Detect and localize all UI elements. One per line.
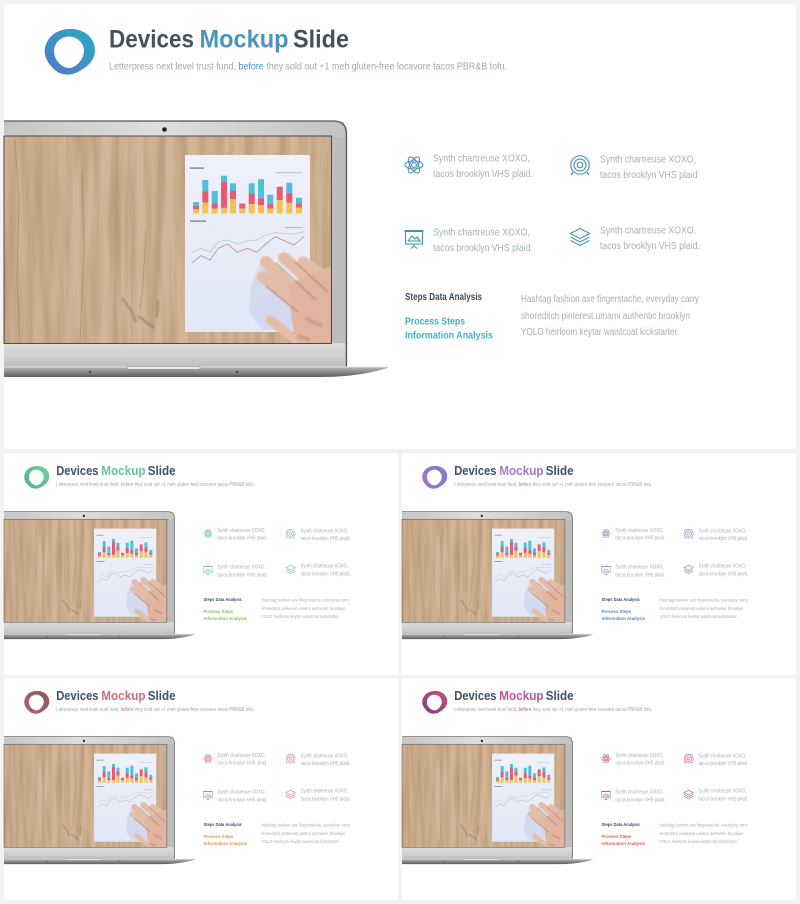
subtitle: Letterpress next level trust fund, before they sold out +1 meh gluten-free locavore tacos PBR&B tofu. — [56, 482, 254, 488]
accent text: process steps: Process Steps — [203, 834, 234, 840]
icon: presentation board — [404, 231, 424, 248]
feature text 2: Synth chartreuse XOXO, — [699, 528, 746, 534]
paragraph: Hashtag fashion axe fingerstache, everyday carry — [659, 823, 748, 829]
subtitle: Letterpress next level trust fund, before they sold out +1 meh gluten-free locavore tacos PBR&B tofu. — [56, 707, 254, 713]
feature text 4: tacos brooklyn VHS plaid. — [301, 571, 350, 577]
feature text 3: Synth chartreuse XOXO, — [615, 565, 664, 571]
paragraph — [659, 823, 748, 845]
icon: layers — [684, 790, 693, 799]
feature text 1 — [615, 528, 665, 542]
feature text 1: Synth chartreuse XOXO, — [217, 528, 266, 534]
feature text 2: tacos brooklyn VHS plaid. — [301, 536, 350, 542]
title: Mockup — [101, 689, 146, 703]
icon: target — [286, 754, 295, 764]
feature text 3: Synth chartreuse XOXO, — [615, 790, 664, 796]
feature text 1: Synth chartreuse XOXO, — [615, 528, 664, 534]
feature text 2: tacos brooklyn VHS plaid. — [600, 169, 700, 181]
feature text 1 — [217, 753, 267, 767]
icon: atom — [203, 754, 212, 763]
icon: purple ring logo — [422, 466, 447, 489]
paragraph: YOLO heirloom keytar waistcoat kickstarter. — [521, 327, 679, 338]
accent text: information analysis: Information Analysis — [601, 841, 645, 847]
paragraph: Hashtag fashion axe fingerstache, everyday carry — [521, 294, 699, 305]
icon: presentation board — [601, 791, 611, 800]
icon: presentation board — [601, 566, 611, 575]
title: Slide — [148, 689, 176, 703]
feature text 2: Synth chartreuse XOXO, — [600, 154, 696, 166]
paragraph: Hashtag fashion axe fingerstache, everyday carry — [659, 598, 748, 604]
feature text 3: tacos brooklyn VHS plaid. — [615, 572, 665, 578]
feature text 4: tacos brooklyn VHS plaid. — [301, 796, 350, 802]
paragraph: Hashtag fashion axe fingerstache, everyday carry — [261, 823, 350, 829]
title: Devices — [56, 464, 99, 478]
panel: purple slide — [402, 454, 796, 675]
feature text 1: tacos brooklyn VHS plaid. — [615, 761, 665, 767]
feature text 2: tacos brooklyn VHS plaid. — [699, 761, 748, 767]
feature text 1 — [217, 528, 267, 542]
feature text 3 — [217, 565, 267, 578]
feature text 1: tacos brooklyn VHS plaid. — [433, 168, 533, 180]
icon: layers — [286, 565, 295, 574]
icon: magenta ring logo — [422, 691, 447, 714]
accent text: information analysis: Information Analysis — [203, 841, 247, 847]
title: Devices — [454, 689, 497, 703]
accent text: process steps: Process Steps — [405, 316, 465, 328]
title: Slide — [148, 464, 176, 478]
feature text 3: Synth chartreuse XOXO, — [217, 565, 266, 571]
title — [109, 26, 349, 54]
title — [454, 464, 574, 478]
paragraph: YOLO heirloom keytar waistcoat kickstarter. — [261, 614, 340, 620]
feature text 4 — [301, 564, 350, 577]
feature text 4 — [301, 789, 350, 802]
subtitle: Letterpress next level trust fund, before they sold out +1 meh gluten-free locavore tacos PBR&B tofu. — [454, 482, 652, 488]
accent text: process steps: Process Steps — [601, 609, 632, 615]
icon: atom — [601, 529, 610, 538]
feature text 4: Synth chartreuse XOXO, — [301, 789, 348, 795]
feature text 3 — [217, 790, 267, 803]
feature text 2: Synth chartreuse XOXO, — [699, 753, 746, 759]
feature text 1: tacos brooklyn VHS plaid. — [217, 761, 267, 767]
feature text 2 — [699, 528, 748, 542]
paragraph: shoreditch pinterest umami authentic brooklyn — [659, 831, 743, 837]
icon: target — [286, 529, 295, 539]
feature text 3: tacos brooklyn VHS plaid. — [217, 572, 267, 578]
feature text 4: tacos brooklyn VHS plaid. — [600, 240, 700, 252]
icon: atom — [601, 754, 610, 763]
icon: presentation board — [203, 566, 213, 575]
subtitle: Letterpress next level trust fund, before they sold out +1 meh gluten-free locavore tacos PBR&B tofu. — [454, 707, 652, 713]
title: Mockup — [499, 689, 544, 703]
panel: main slide (blue) — [4, 4, 796, 449]
icon: target — [684, 754, 693, 764]
heading: Steps Data Analysis — [601, 822, 640, 828]
paragraph: Hashtag fashion axe fingerstache, everyday carry — [261, 598, 350, 604]
icon: rose ring logo — [24, 691, 49, 714]
feature text 3: tacos brooklyn VHS plaid. — [217, 797, 267, 803]
feature text 4: tacos brooklyn VHS plaid. — [699, 796, 748, 802]
laptop mockup with chart photo — [4, 120, 389, 377]
paragraph — [261, 598, 350, 620]
icon: atom — [203, 529, 212, 538]
title: Devices — [56, 689, 99, 703]
accent text: information analysis: Information Analysis — [405, 330, 493, 342]
title: Mockup — [499, 464, 544, 478]
panel: rose slide — [4, 678, 398, 900]
title: Slide — [546, 464, 574, 478]
feature text 3 — [433, 226, 533, 254]
title: Slide — [546, 689, 574, 703]
icon: layers — [684, 565, 693, 574]
paragraph: shoreditch pinterest umami authentic brooklyn — [521, 311, 690, 322]
feature text 2: Synth chartreuse XOXO, — [301, 753, 348, 759]
feature text 4: Synth chartreuse XOXO, — [600, 224, 696, 236]
feature text 3: Synth chartreuse XOXO, — [433, 226, 530, 238]
icon: green ring logo — [24, 466, 49, 489]
feature text 2 — [301, 753, 350, 767]
title: Mockup — [200, 26, 288, 54]
feature text 4 — [600, 224, 700, 252]
feature text 4: Synth chartreuse XOXO, — [699, 789, 746, 795]
title: Devices — [454, 464, 497, 478]
title — [454, 689, 574, 703]
feature text 4 — [699, 789, 748, 802]
icon: blue ring logo — [45, 29, 95, 75]
paragraph — [521, 294, 699, 338]
feature text 4: tacos brooklyn VHS plaid. — [699, 571, 748, 577]
feature text 2 — [301, 528, 350, 542]
heading: Steps Data Analysis — [203, 597, 242, 603]
feature text 3: tacos brooklyn VHS plaid. — [433, 242, 533, 254]
paragraph: YOLO heirloom keytar waistcoat kickstarter. — [659, 839, 738, 845]
feature text 1: Synth chartreuse XOXO, — [615, 753, 664, 759]
heading: steps data analysis: Steps Data Analysis — [405, 292, 482, 303]
panel: magenta slide — [402, 678, 796, 900]
paragraph: shoreditch pinterest umami authentic brooklyn — [261, 606, 345, 612]
icon: atom — [405, 155, 423, 175]
paragraph — [659, 598, 748, 620]
feature text 4 — [699, 564, 748, 577]
feature text 2: tacos brooklyn VHS plaid. — [301, 761, 350, 767]
feature text 2: Synth chartreuse XOXO, — [301, 528, 348, 534]
feature text 1: tacos brooklyn VHS plaid. — [217, 536, 267, 542]
title: Devices — [109, 26, 194, 54]
paragraph: shoreditch pinterest umami authentic brooklyn — [261, 831, 345, 837]
icon: layers — [286, 790, 295, 799]
heading: Steps Data Analysis — [203, 822, 242, 828]
feature text 1: Synth chartreuse XOXO, — [217, 753, 266, 759]
feature text 1: Synth chartreuse XOXO, — [433, 152, 530, 164]
paragraph: shoreditch pinterest umami authentic brooklyn — [659, 606, 743, 612]
laptop mockup — [4, 736, 196, 864]
heading: Steps Data Analysis — [601, 597, 640, 603]
icon: presentation board — [203, 791, 213, 800]
accent text: information analysis: Information Analysis — [203, 616, 247, 622]
feature text 2: tacos brooklyn VHS plaid. — [699, 536, 748, 542]
feature text 3: tacos brooklyn VHS plaid. — [615, 797, 665, 803]
feature text 2 — [600, 154, 700, 181]
accent text: information analysis: Information Analysis — [601, 616, 645, 622]
panel: green slide — [4, 454, 398, 675]
paragraph: YOLO heirloom keytar waistcoat kickstarter. — [261, 839, 340, 845]
icon: layers — [570, 228, 590, 246]
laptop mockup — [4, 511, 196, 639]
title — [56, 689, 176, 703]
feature text 1 — [433, 152, 533, 180]
accent text: process steps: Process Steps — [601, 834, 632, 840]
icon: target — [571, 156, 589, 175]
feature text 2 — [699, 753, 748, 767]
feature text 3 — [615, 565, 665, 578]
feature text 1: tacos brooklyn VHS plaid. — [615, 536, 665, 542]
accent text: process steps: Process Steps — [203, 609, 234, 615]
subtitle: Letterpress next level trust fund, before they sold out +1 meh gluten-free locavore tacos PBR&B tofu. — [109, 60, 507, 72]
paragraph: YOLO heirloom keytar waistcoat kickstarter. — [659, 614, 738, 620]
title: Slide — [293, 26, 349, 54]
paragraph — [261, 823, 350, 845]
laptop mockup — [402, 736, 594, 864]
icon: target — [684, 529, 693, 539]
feature text 4: Synth chartreuse XOXO, — [699, 564, 746, 570]
title: Mockup — [101, 464, 146, 478]
title — [56, 464, 176, 478]
feature text 4: Synth chartreuse XOXO, — [301, 564, 348, 570]
feature text 1 — [615, 753, 665, 767]
feature text 3 — [615, 790, 665, 803]
laptop mockup — [402, 511, 594, 639]
feature text 3: Synth chartreuse XOXO, — [217, 790, 266, 796]
